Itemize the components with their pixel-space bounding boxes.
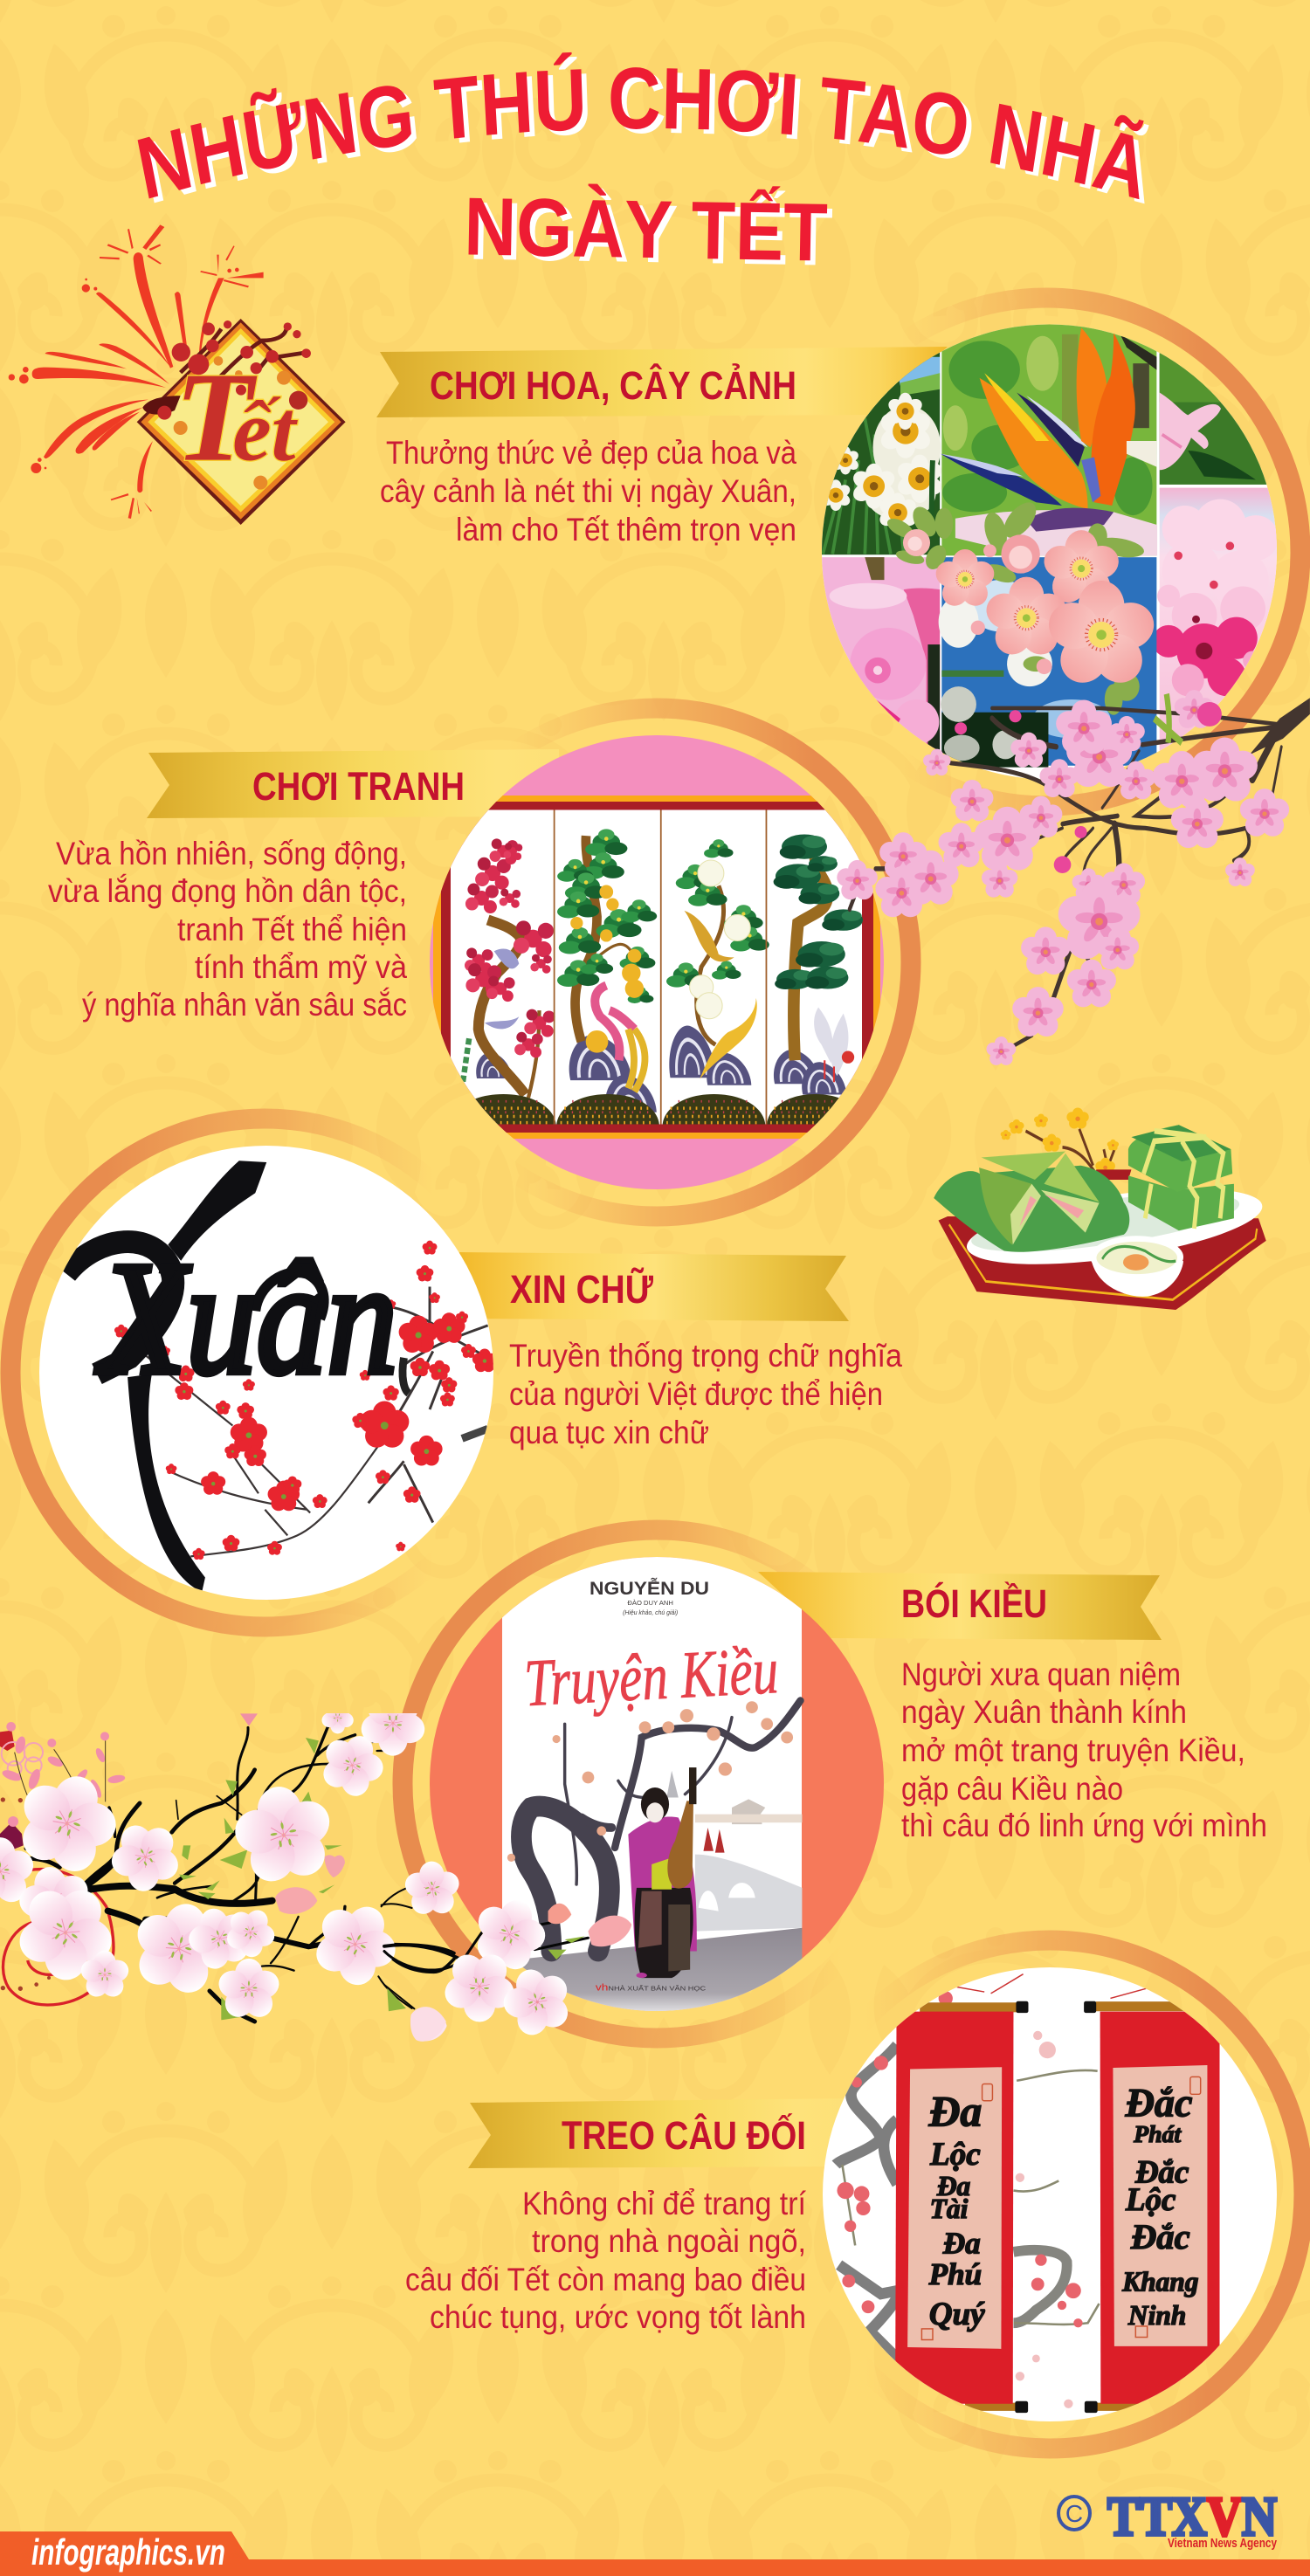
branch: pink cherry blossoms upper right <box>837 690 1310 1065</box>
photo: pink hibiscus <box>822 557 940 750</box>
brush flourishes and word Xuân: Xuân <box>95 1229 397 1409</box>
title line 1: curved heading: NHỮNG THÚ CHƠI TAO NHÃ <box>148 56 1149 204</box>
body text: ngày Xuân thành kính <box>901 1694 1187 1730</box>
heading: XIN CHỮ <box>510 1267 654 1312</box>
book note: (Hiệu khảo, chú giải) <box>623 1609 678 1616</box>
photo: narcissus <box>822 353 941 555</box>
black branches <box>26 1718 454 2022</box>
heading: BÓI KIỀU <box>901 1581 1047 1626</box>
photo: bird of paradise <box>941 318 1157 555</box>
ribbon banners behind circles <box>147 347 1162 2168</box>
right scroll: Ninh <box>1127 2300 1186 2331</box>
body text: ý nghĩa nhân văn sâu sắc <box>82 987 407 1023</box>
footer site name: infographics.vn <box>31 2531 225 2573</box>
woman with lute <box>628 1767 697 1978</box>
book title: Truyện Kiều <box>522 1633 780 1720</box>
panel: flowers photo collage <box>812 314 1284 790</box>
agency tagline: Vietnam News Agency <box>1168 2536 1278 2551</box>
blossoms <box>837 690 1289 1065</box>
banner: CHƠI HOA <box>376 347 948 417</box>
panel: Xuân calligraphy <box>35 1140 498 1607</box>
photo: pink lily <box>1160 353 1266 485</box>
right scroll <box>1084 2001 1220 2413</box>
heading: CHƠI TRANH <box>252 764 465 809</box>
body text <box>901 1656 1267 1843</box>
ring: parallel scrolls <box>796 1940 1304 2449</box>
body text: qua tục xin chữ <box>509 1415 709 1450</box>
logo: TTXVN <box>1058 2485 1278 2551</box>
painting: pine and cranes <box>767 834 864 1126</box>
section: TREO CÂU ĐỐI <box>405 2113 807 2335</box>
body text: câu đối Tết còn mang bao điều <box>405 2262 806 2297</box>
right scroll: Phát <box>1133 2121 1182 2148</box>
left scroll: Đa <box>936 2171 970 2201</box>
body text: cây cảnh là nét thi vị ngày Xuân, <box>380 473 796 509</box>
photo: pink cherry blossoms <box>1156 487 1277 751</box>
title line 2: NGÀY TẾT <box>464 180 828 279</box>
body text: gặp câu Kiều nào <box>901 1771 1123 1807</box>
body text: trong nhà ngoài ngõ, <box>532 2223 806 2259</box>
title line 2: NGÀY TẾT <box>469 184 833 283</box>
left scroll: Đa <box>942 2227 981 2261</box>
icon: Tết diamond with fireworks <box>9 224 346 525</box>
book cover painting <box>502 1701 802 2015</box>
title line 1: curved heading: NHỮNG THÚ CHƠI TAO NHÃ <box>138 52 1144 199</box>
body text: chúc tụng, ước vọng tốt lành <box>430 2299 806 2335</box>
right scroll: Đắc <box>1134 2154 1189 2190</box>
painting: phoenix and apricot <box>556 829 659 1126</box>
circle flowers: salmon blossoms overlay <box>885 497 1160 715</box>
book editor: ĐÀO DUY ANH <box>627 1599 673 1607</box>
body text <box>48 836 407 1023</box>
left scroll: Đa <box>927 2087 982 2136</box>
sliced cake <box>979 1151 1100 1245</box>
green leaf buds <box>179 1738 406 2020</box>
body text: thì câu đó linh ứng với mình <box>901 1808 1267 1843</box>
heading: TREO CÂU ĐỐI <box>562 2113 806 2158</box>
panel: folk paintings <box>428 734 886 1192</box>
blossoms <box>0 1688 469 2022</box>
branch: white-pink blossoms left <box>0 1688 631 2049</box>
banner: TREO CÂU ĐỐI <box>468 2098 852 2168</box>
body text <box>380 435 796 548</box>
left scroll <box>895 2001 1028 2413</box>
plum blossoms <box>114 1241 497 1560</box>
left scroll: Quý <box>929 2297 985 2332</box>
branches <box>850 708 1283 1048</box>
painting: peony and pheasant <box>663 839 769 1126</box>
section: CHƠI HOA, CÂY CẢNH <box>380 363 796 548</box>
photo: white flowers on sky <box>939 557 1156 768</box>
body text: Truyền thống trọng chữ nghĩa <box>509 1338 902 1374</box>
body text <box>405 2186 807 2335</box>
left scroll: Tài <box>930 2194 969 2224</box>
footer bar <box>0 2531 1310 2576</box>
banner: XIN CHỮ <box>459 1252 849 1321</box>
copyright mark <box>1058 2497 1090 2530</box>
body text: của người Việt được thể hiện <box>509 1376 883 1412</box>
right scroll: Khang <box>1121 2266 1198 2297</box>
panel: Truyện Kiều book <box>428 1554 886 2015</box>
Tết calligraphy: Tết <box>175 346 299 488</box>
banner: BÓI KIỀU <box>758 1572 1162 1640</box>
body text: tranh Tết thể hiện <box>177 912 407 947</box>
publisher: vhNHÀ XUẤT BẢN VĂN HỌC <box>596 1983 707 1994</box>
body text: Không chỉ để trang trí <box>522 2186 807 2221</box>
right scroll: Lộc <box>1125 2182 1176 2218</box>
banner: CHƠI TRANH <box>147 749 559 818</box>
body text: Thưởng thức vẻ đẹp của hoa và <box>386 435 796 471</box>
right scroll: Đắc <box>1130 2217 1190 2256</box>
section: BÓI KIỀU <box>901 1581 1267 1843</box>
body text: vừa lắng đọng hồn dân tộc, <box>48 873 407 909</box>
panel: parallel scrolls <box>817 1965 1284 2428</box>
ring: paintings <box>403 708 911 1216</box>
ring: calligraphy <box>10 1119 519 1627</box>
leaves <box>934 1166 1129 1252</box>
right scroll: Đắc <box>1124 2081 1192 2125</box>
body text: mở một trang truyện Kiều, <box>901 1732 1245 1768</box>
copyright mark: C <box>1065 2500 1083 2527</box>
square cakes <box>1128 1125 1234 1230</box>
apricot twig <box>1001 1108 1119 1176</box>
plum background <box>836 1974 1146 2408</box>
buds <box>240 1713 447 2041</box>
body text: Người xưa quan niệm <box>901 1656 1181 1692</box>
agency wordmark: TTXVN <box>1107 2485 1277 2547</box>
title <box>138 52 1149 283</box>
painting: plum and birds <box>451 838 556 1126</box>
ring: Kiều <box>403 1530 911 2038</box>
ring: flowers <box>792 298 1300 806</box>
brush flourishes and word Xuân <box>66 1161 397 1592</box>
book author: NGUYỄN DU <box>590 1576 709 1599</box>
body text: Vừa hồn nhiên, sống động, <box>56 836 407 871</box>
heading: CHƠI HOA, CÂY CẢNH <box>430 363 796 408</box>
icon: bánh chưng tray <box>934 1108 1266 1310</box>
left scroll: Lộc <box>929 2137 981 2173</box>
body text: làm cho Tết thêm trọn vẹn <box>456 512 796 548</box>
plum branches <box>116 1286 488 1556</box>
body text: tính thẩm mỹ và <box>195 949 407 985</box>
dipping bowl <box>1090 1236 1183 1297</box>
section: CHƠI TRANH <box>48 764 465 1023</box>
swirl and berries <box>0 1722 126 2005</box>
left scroll: Phú <box>928 2257 982 2291</box>
body text <box>509 1338 902 1450</box>
section: XIN CHỮ <box>509 1267 902 1450</box>
